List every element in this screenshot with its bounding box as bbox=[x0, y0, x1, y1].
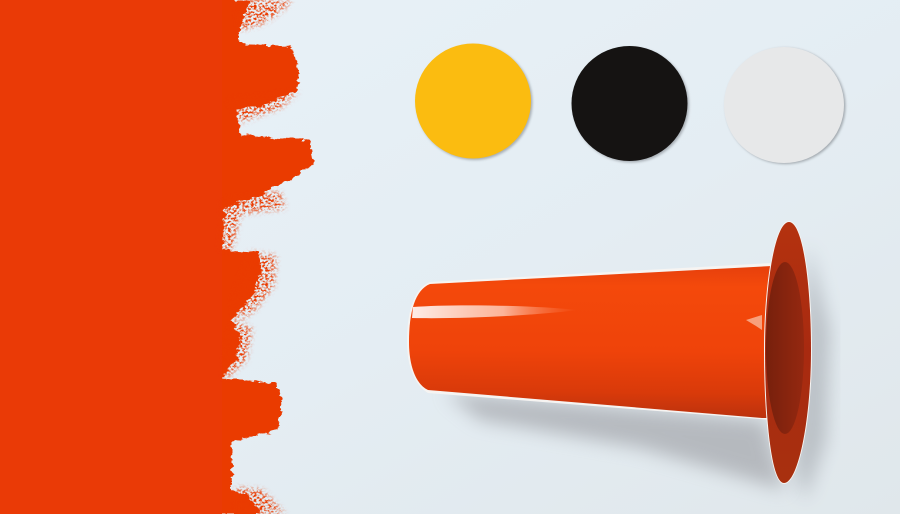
cone shadow bbox=[445, 392, 785, 490]
icon: black disc bbox=[572, 46, 689, 162]
cone body bbox=[409, 266, 772, 418]
dry brush speckle bbox=[220, 0, 298, 514]
flare opening bbox=[766, 262, 804, 434]
icon: orange cone bbox=[407, 221, 830, 500]
icon: yellow disc bbox=[415, 44, 532, 160]
icon: white disc bbox=[724, 47, 846, 164]
flare rim bbox=[765, 222, 811, 483]
highlight on cone bbox=[412, 305, 578, 318]
cone white edge bbox=[407, 263, 772, 420]
panel: orange paint swatch with brushed edge bbox=[0, 0, 313, 514]
flare white edge bbox=[764, 221, 812, 484]
